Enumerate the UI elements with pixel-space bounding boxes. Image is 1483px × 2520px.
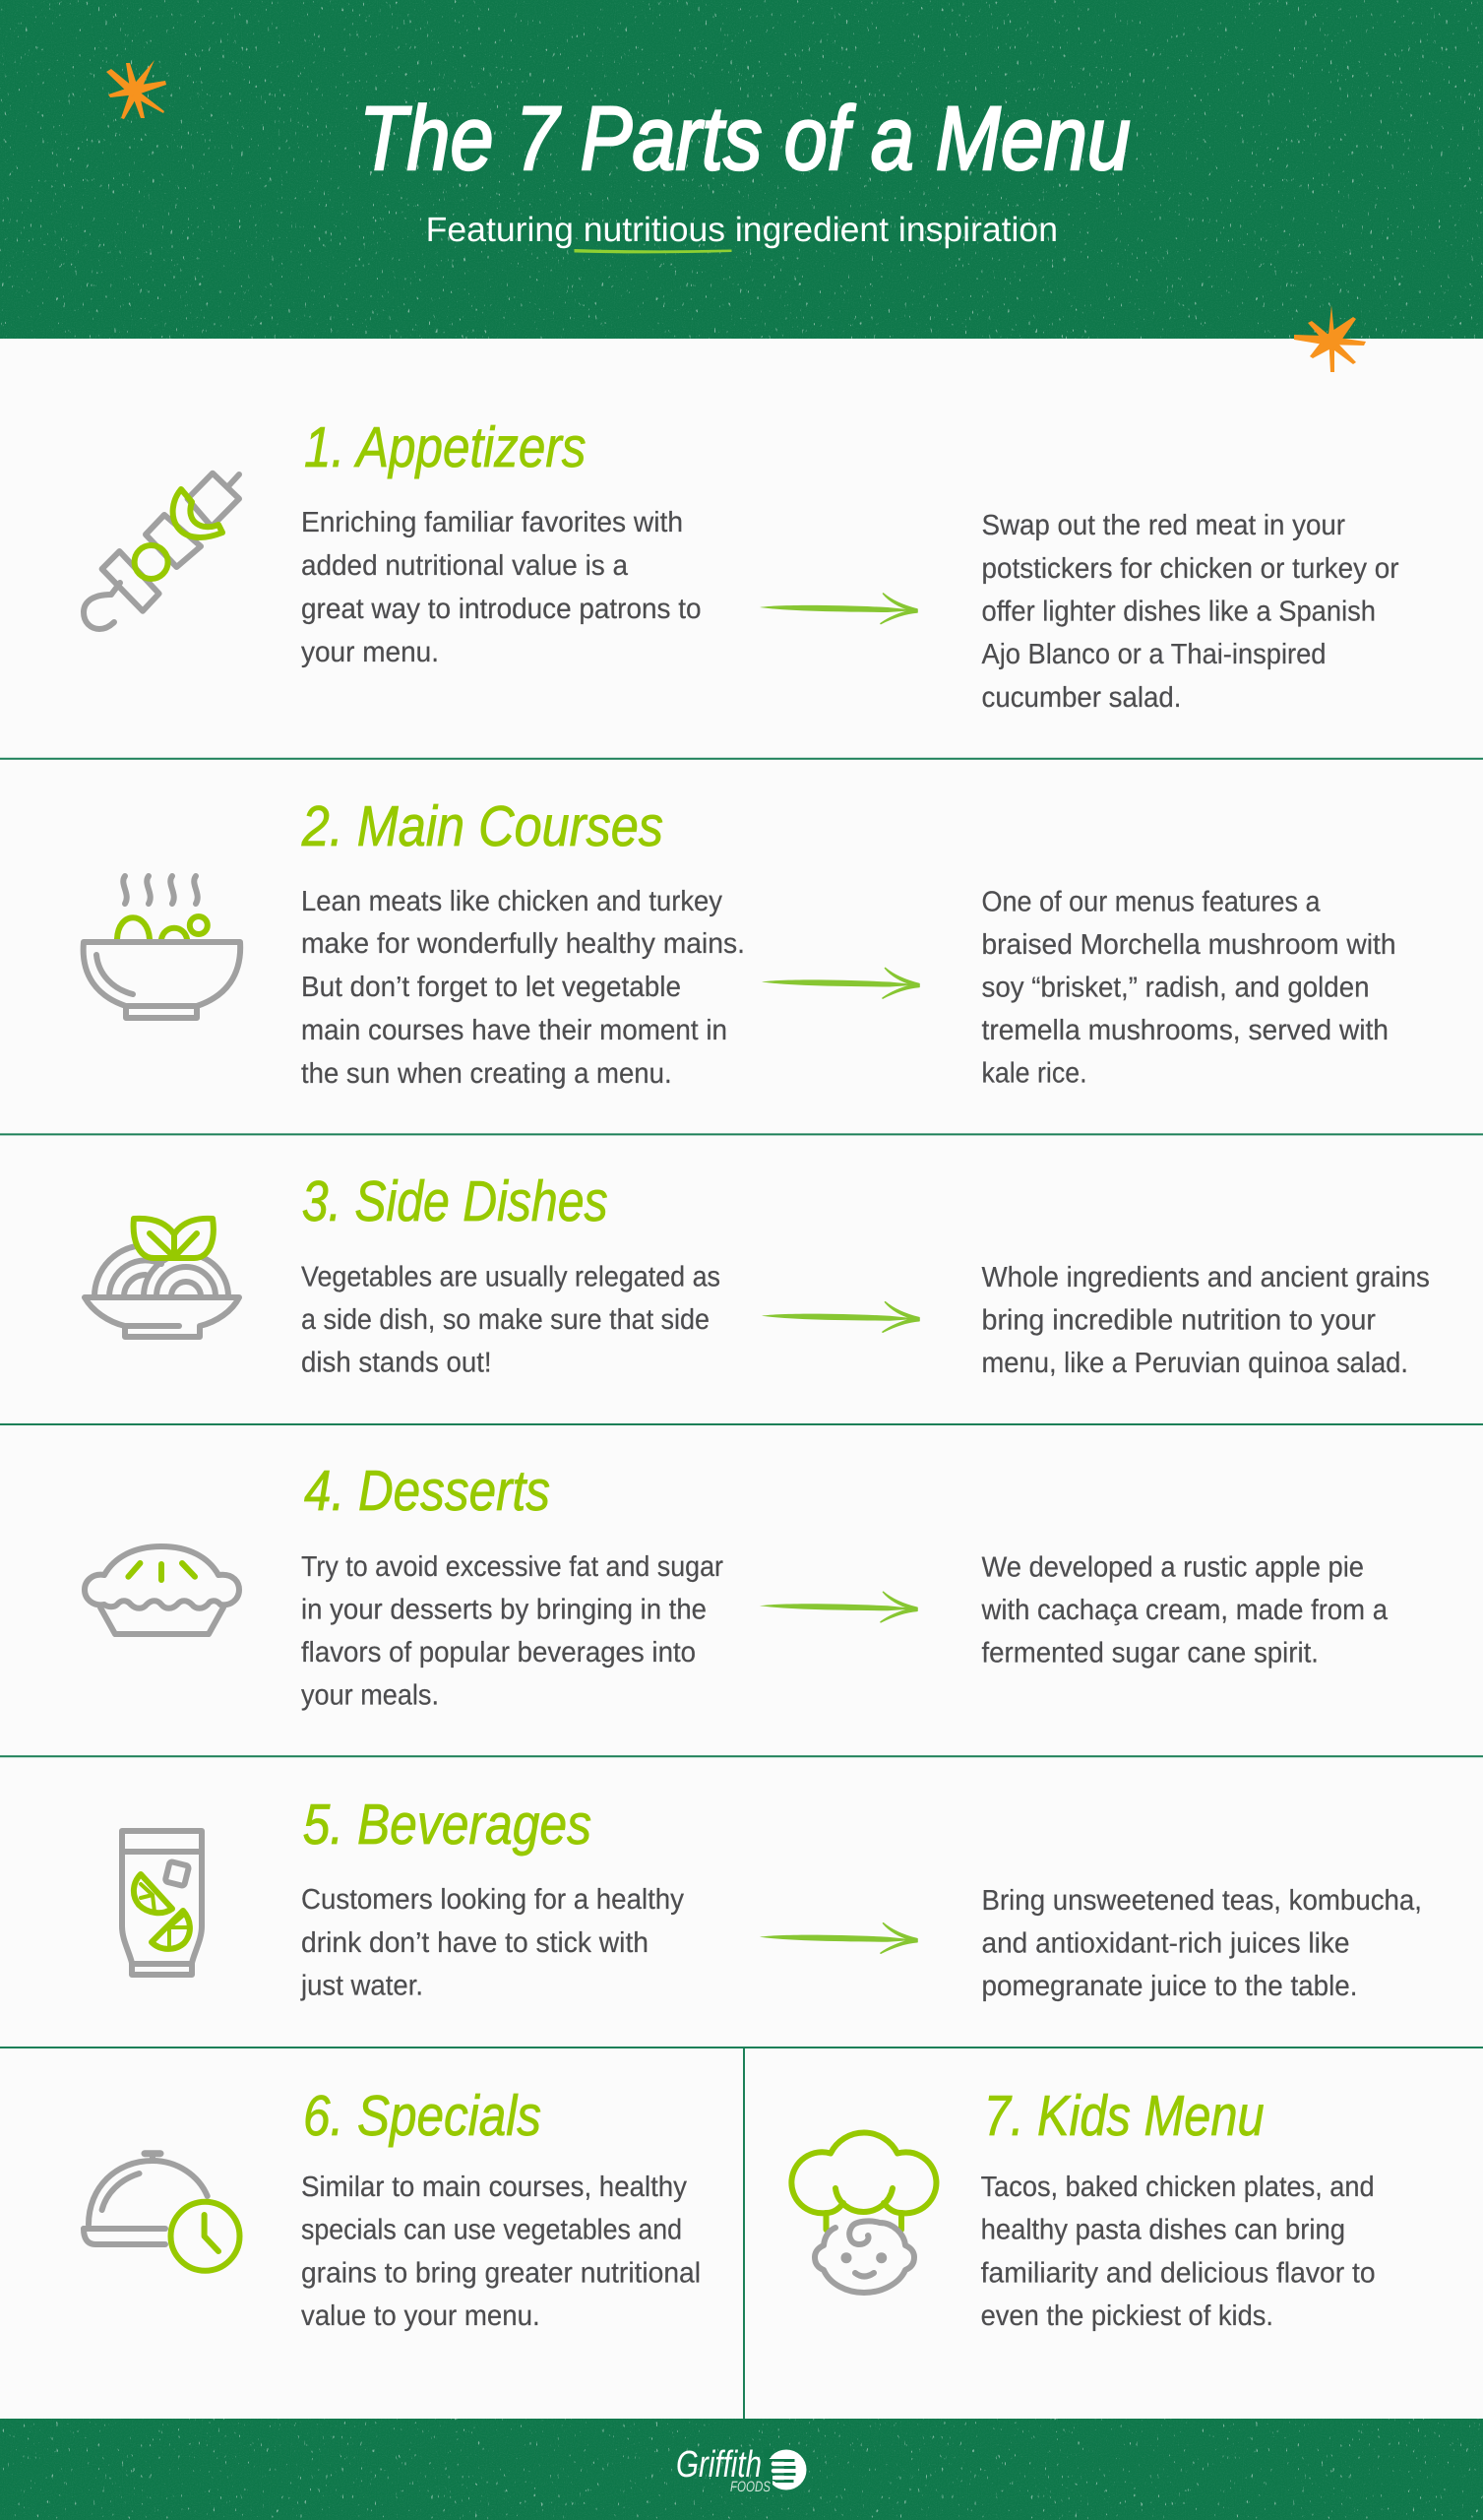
text: description: specials can use vegetables and (301, 2215, 682, 2246)
text: description: value to your menu. (301, 2300, 540, 2332)
header banner (0, 0, 1483, 339)
text: description (981, 2172, 1376, 2332)
arrow (760, 1592, 917, 1622)
text: right example: Ajo Blanco or a Thai-inspired (982, 639, 1327, 670)
text: left description: great way to introduce patrons to (301, 594, 701, 625)
text: right example (982, 886, 1395, 1090)
text: right example (982, 510, 1399, 714)
arrow (762, 1302, 919, 1332)
text: left description: But don’t forget to let vegetable (301, 972, 681, 1003)
text: left description: added nutritional value is a (301, 550, 629, 582)
text: description: Tacos, baked chicken plates, and (981, 2172, 1375, 2203)
footer banner (0, 2419, 1483, 2520)
text: right example: braised Morchella mushroom with (982, 929, 1395, 961)
arrow (760, 594, 917, 624)
text: left description: Customers looking for a healthy (301, 1884, 684, 1916)
text: left description: your menu. (301, 637, 439, 668)
panel: kids menu (791, 2084, 1376, 2332)
arrow (762, 969, 919, 998)
text: left description: a side dish, so make sure that side (301, 1304, 710, 1336)
icon: child with chef hat (791, 2132, 936, 2293)
heading: 7. Kids Menu (984, 2084, 1265, 2148)
text: right example (981, 1551, 1389, 1669)
panel: side dishes (85, 1169, 1430, 1379)
text: right example (982, 1885, 1422, 2002)
text: left description (300, 1884, 684, 2002)
icon: steaming bowl (84, 876, 240, 1018)
text: right example: soy “brisket,” radish, and golden (982, 973, 1370, 1004)
text: right example: and antioxidant-rich juices like (982, 1927, 1350, 1959)
eyes (840, 2252, 887, 2263)
text: description: even the pickiest of kids. (981, 2300, 1273, 2332)
text: left description (301, 1551, 723, 1712)
text: right example: menu, like a Peruvian quinoa salad. (982, 1348, 1408, 1379)
text: right example: with cachaça cream, made from a (981, 1595, 1389, 1626)
heading: 5. Beverages (303, 1793, 591, 1857)
text: right example: We developed a rustic apple pie (982, 1551, 1364, 1583)
text: left description: flavors of popular beverages into (301, 1637, 696, 1669)
icon: noodle bowl with leaves (85, 1219, 239, 1337)
text: left description: in your desserts by bringing in the (301, 1595, 707, 1626)
text: right example: Bring unsweetened teas, kombucha, (982, 1885, 1422, 1917)
text: left description: make for wonderfully healthy mains. (301, 928, 745, 960)
subtitle: Featuring nutritious ingredient inspiration (426, 211, 1058, 249)
text: left description: main courses have their moment in (301, 1015, 727, 1046)
title: The 7 Parts of a Menu (359, 89, 1131, 189)
panel: desserts (85, 1459, 1389, 1712)
icon: glass with citrus (122, 1831, 202, 1975)
text: left description: just water. (300, 1971, 423, 2002)
text: left description: dish stands out! (301, 1347, 492, 1378)
heading: 4. Desserts (304, 1459, 550, 1523)
logo: Griffith Foods (676, 2444, 807, 2495)
text: left description: your meals. (301, 1680, 439, 1712)
logo: Griffith Foods: Griffith (676, 2444, 762, 2486)
icon: cloche with clock (84, 2154, 240, 2271)
text: left description: Lean meats like chicken and turkey (301, 886, 722, 917)
icon: pie (85, 1546, 239, 1634)
icon: skewer (84, 473, 239, 629)
text: right example: fermented sugar cane spirit. (982, 1637, 1319, 1669)
text: description: familiarity and delicious flavor to (981, 2257, 1376, 2289)
heading: 3. Side Dishes (302, 1169, 608, 1233)
text: description: healthy pasta dishes can bring (981, 2215, 1345, 2246)
text: right example: offer lighter dishes like a Spanish (982, 597, 1376, 628)
text: description: Similar to main courses, healthy (301, 2172, 687, 2203)
panel: main courses (84, 794, 1396, 1090)
text: left description (301, 507, 701, 668)
text: right example: kale rice. (982, 1058, 1086, 1090)
text: left description (301, 1262, 720, 1378)
text: left description: Vegetables are usually relegated as (301, 1262, 720, 1293)
text: right example: tremella mushrooms, served with (982, 1015, 1389, 1046)
text: right example: Swap out the red meat in your (982, 510, 1345, 541)
icon: orange star top left (106, 60, 166, 119)
text: left description: the sun when creating a menu. (301, 1058, 672, 1090)
text: right example: pomegranate juice to the table. (982, 1971, 1358, 2002)
text: description: grains to bring greater nutritional (301, 2257, 701, 2289)
panel: specials (84, 2084, 701, 2332)
text: description (301, 2172, 701, 2332)
text: left description: Enriching familiar favorites with (301, 507, 683, 538)
panel: beverages (122, 1793, 1422, 2002)
heading: 6. Specials (303, 2084, 541, 2148)
text: right example: cucumber salad. (982, 682, 1181, 714)
logo: Griffith Foods: FOODS (730, 2479, 771, 2495)
text: left description: drink don’t have to stick with (301, 1927, 649, 1959)
heading: 1. Appetizers (304, 415, 587, 479)
text: right example: potstickers for chicken or turkey or (982, 553, 1399, 585)
subtitle underline accent (575, 250, 731, 253)
icon: orange star top right (1294, 305, 1366, 372)
text: right example: One of our menus features a (982, 886, 1321, 917)
panel: appetizers (84, 415, 1399, 714)
text: right example: Whole ingredients and ancient grains (982, 1262, 1430, 1293)
text: right example: bring incredible nutrition to your (982, 1305, 1376, 1337)
text: left description (301, 886, 745, 1090)
arrow (760, 1923, 917, 1953)
heading: 2. Main Courses (301, 794, 663, 858)
text: left description: Try to avoid excessive fat and sugar (301, 1551, 723, 1583)
text: right example (982, 1262, 1430, 1379)
